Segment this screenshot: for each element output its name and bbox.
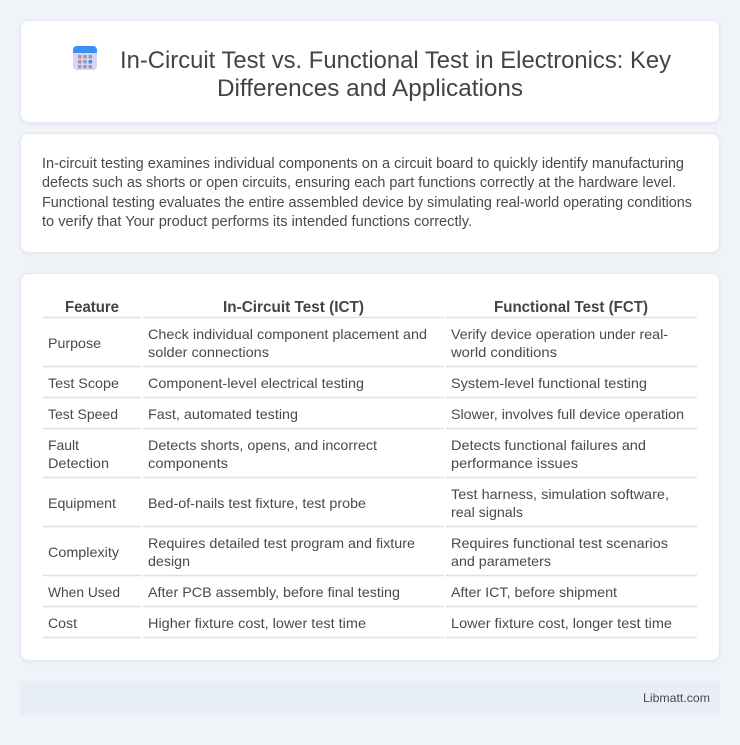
row: Purpose: solder connections (148, 344, 269, 360)
panel: introduction (20, 134, 720, 252)
intro text block: Functional testing evaluates the entire assembled device by simulating real-world operating conditions (42, 195, 692, 211)
row: Fault Detection: Fault (48, 437, 79, 453)
row: Fault Detection (48, 437, 646, 471)
row: Complexity: and parameters (451, 553, 551, 569)
icon: calendar grid (73, 46, 97, 70)
row: Complexity (48, 535, 668, 569)
row: Equipment: Test harness, simulation software, (451, 486, 669, 502)
row: Cost: Higher fixture cost, lower test time (148, 615, 366, 631)
row: Test Speed (48, 406, 684, 422)
heading: In-Circuit Test vs. Functional Test in Electronics: Key (120, 47, 671, 74)
row: Test Speed: Slower, involves full device operation (451, 406, 684, 422)
row: Equipment: Bed-of-nails test fixture, test probe (148, 495, 366, 511)
row: Fault Detection: Detects shorts, opens, and incorrect (148, 437, 377, 453)
row: Test Speed: Test Speed (48, 406, 118, 422)
row: When Used: After ICT, before shipment (451, 584, 617, 600)
intro text block (42, 156, 692, 230)
row: Test Scope: System-level functional testing (451, 375, 647, 391)
row: When Used: When Used (48, 584, 120, 600)
row: When Used (48, 584, 617, 600)
footer (20, 681, 720, 715)
row: Complexity: design (148, 553, 190, 569)
row: Test Scope: Component-level electrical testing (148, 375, 364, 391)
heading (120, 47, 671, 102)
table header: Functional Test (FCT) (494, 299, 648, 316)
intro text block: In-circuit testing examines individual components on a circuit board to quickly identify manufacturing (42, 156, 684, 172)
row: Equipment: Equipment (48, 495, 116, 511)
panel: comparison table (20, 274, 720, 660)
row: Fault Detection: Detects functional failures and (451, 437, 646, 453)
row: Purpose: Purpose (48, 335, 101, 351)
table header (65, 299, 648, 316)
panel: title (20, 20, 720, 122)
heading: Differences and Applications (217, 75, 523, 102)
intro text block: defects such as shorts or open circuits, ensuring each part functions correctly at the hardware level. (42, 175, 676, 191)
table header: Feature (65, 299, 119, 316)
row: Purpose: world conditions (450, 344, 557, 360)
row: Purpose: Verify device operation under real- (451, 326, 668, 342)
intro text block: to verify that Your product performs its intended functions correctly. (42, 214, 472, 230)
row: Cost: Lower fixture cost, longer test time (451, 615, 672, 631)
row: Test Speed: Fast, automated testing (148, 406, 298, 422)
row: Test Scope: Test Scope (48, 375, 119, 391)
row: Complexity: Complexity (48, 544, 119, 560)
row: Fault Detection: performance issues (451, 455, 578, 471)
row: Purpose (48, 326, 668, 360)
row: Complexity: Requires functional test scenarios (451, 535, 668, 551)
row: Test Scope (48, 375, 647, 391)
row: Cost (48, 615, 672, 631)
row: Cost: Cost (48, 615, 77, 631)
row: Equipment: real signals (451, 504, 523, 520)
row: When Used: After PCB assembly, before final testing (148, 584, 400, 600)
row: Fault Detection: Detection (48, 455, 109, 471)
row: Equipment (48, 486, 669, 520)
row: Purpose: Check individual component placement and (148, 326, 427, 342)
footer: Libmatt.com (643, 691, 710, 705)
row: Fault Detection: components (148, 455, 228, 471)
table header: In-Circuit Test (ICT) (223, 299, 364, 316)
row: Complexity: Requires detailed test program and fixture (148, 535, 415, 551)
